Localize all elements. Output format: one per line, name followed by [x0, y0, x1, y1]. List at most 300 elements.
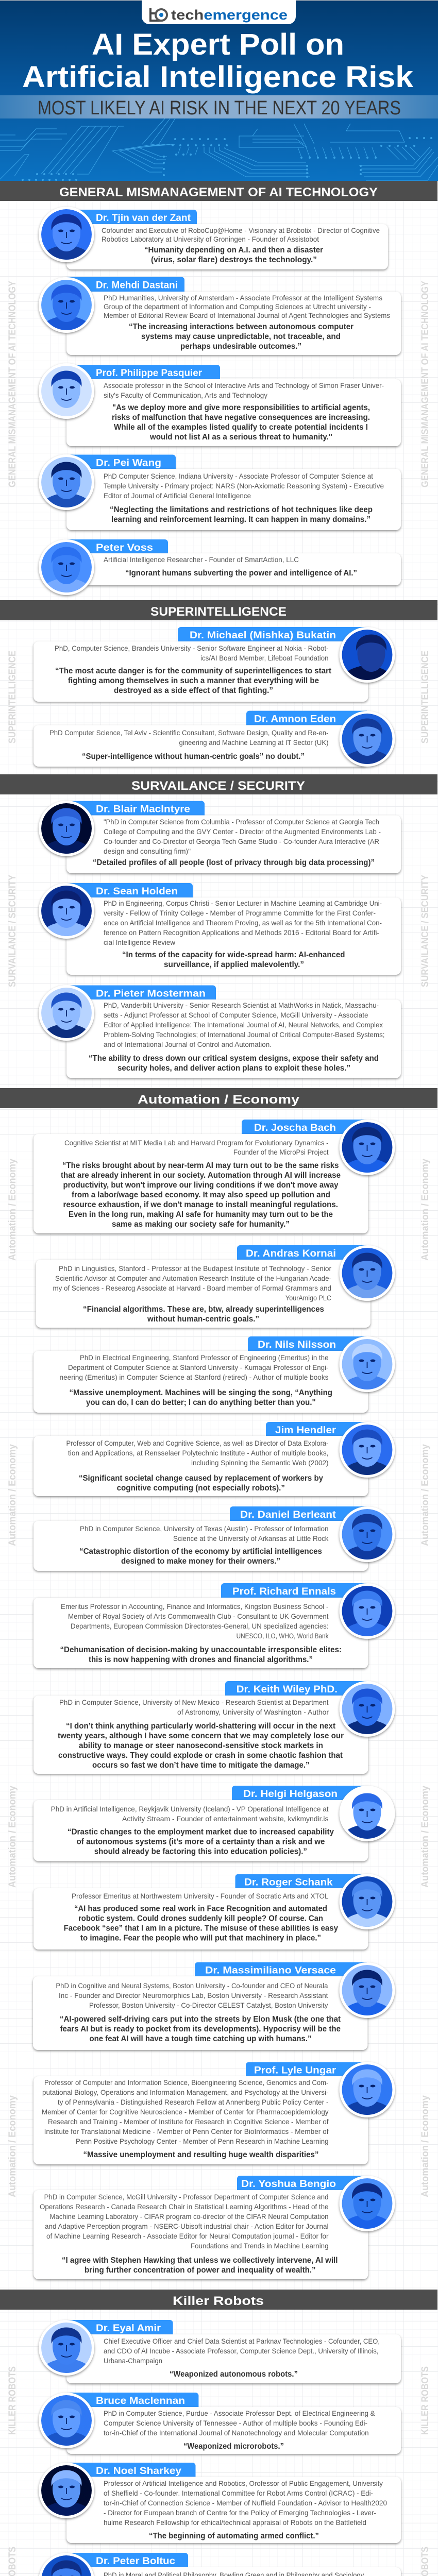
name tab: Dr. Eyal Amir [96, 2323, 161, 2334]
portrait [339, 1786, 395, 1841]
portrait [39, 801, 94, 856]
bio: Group of the department of Information and Computing Sciences at Utrecht university - [104, 302, 371, 311]
bio: PhD in Cognitive and Neural Systems, Boston University - Co-founder and CEO of Neurala [56, 1981, 328, 1990]
panel: Dr. Blair MacIntyre [39, 801, 401, 873]
quote: constructive ways. They could explode or crash in some chaotic fashion that [58, 1751, 343, 1760]
side labels: Automation / Economy [7, 1444, 18, 1546]
portrait [39, 454, 94, 510]
panel: Dr. Roger Schank [33, 1874, 395, 1950]
name tab: Dr. Mehdi Dastani [96, 280, 178, 291]
bio [104, 1001, 384, 1048]
name tab: Prof. Philippe Pasquier [96, 368, 203, 379]
title [22, 28, 414, 94]
bio [55, 644, 329, 662]
bio: - Director for European branch of Centre for the Policy of Emerging Technologies - Lever- [104, 2509, 376, 2517]
name tab: Bruce Maclennan [96, 2396, 185, 2406]
name tab: Dr. Pei Wang [96, 457, 161, 469]
quote: resource exhaustion, if we don't manage to install meaningful regulations. [63, 1200, 338, 1209]
heading: Survailance / Security: SURVAILANCE / SECURITY [131, 779, 305, 793]
bio: of Astronomy, University of Washington - Author [177, 1708, 329, 1716]
heading: Automation / Economy: Automation / Economy [138, 1093, 300, 1107]
name tab [66, 2320, 173, 2334]
card [66, 815, 401, 873]
quote [55, 667, 332, 695]
bio: Inc - Founder and Director Neuromorphics Lab, Boston University - Research Assistant [59, 1991, 328, 1999]
quote: “AI-powered self-driving cars put into the streets by Elon Musk (the one that [60, 2015, 341, 2024]
portrait [39, 2553, 94, 2576]
quote: “The most acute danger is for the community of superintelligences to start [55, 667, 332, 675]
bio: ence on Artificial Intelligence and Theorem Proving, as well as for the 5th International Con- [104, 919, 382, 927]
name tab [237, 1245, 367, 1260]
bio: Professor of Computer, Web and Cognitive Science, as well as Director of Data Explora- [66, 1439, 329, 1447]
bio: Scientific Advisor at Computer and Automation Research Institute of the Hungarian Acade- [55, 1274, 331, 1282]
name tab [230, 1506, 367, 1521]
quote [112, 403, 370, 442]
side labels: GENERAL MISMANAGEMENT OF AI TECHNOLOGY [420, 281, 431, 487]
bio: tion and Applications, at Rensselaer Polytechnic Institute - Author of multiple books, [68, 1449, 329, 1457]
quote [79, 1547, 322, 1566]
quote: ability to manage or steer nanosecond-sensitive stock markets in [79, 1741, 323, 1750]
name tab [66, 985, 216, 999]
card [33, 2190, 368, 2279]
card [33, 1598, 368, 1668]
panel: Dr. Yoshua Bengio [33, 2176, 395, 2279]
quote: security holes, and deliver action plans to exploit these holes.” [117, 1064, 350, 1073]
quote: bring further concentration of power and inequality of wealth.” [85, 2266, 316, 2275]
name tab: Dr. Michael (Mishka) Bukatin [190, 630, 336, 641]
bio: College of Computing and the GVY Center - Director of the Augmented Environments Lab - [104, 827, 381, 836]
heading: General Mismanagement of AI Technology: GENERAL MISMANAGEMENT OF AI TECHNOLOGY [59, 185, 378, 199]
bio: setts - Adjunct Professor at School of Computer Science, McGill University - Associate [104, 1011, 368, 1019]
card [33, 1976, 367, 2050]
name tab [66, 277, 184, 292]
portrait [339, 711, 395, 767]
card [66, 292, 401, 355]
quote: twenty years, although I have some concern that we may completely lose our [58, 1732, 344, 1740]
bio: Penn Positive Psychology Center - Member of Penn Research in Machine Learning [76, 2137, 329, 2145]
heading: Superintelligence: SUPERINTELLIGENCE [150, 605, 287, 619]
quote [89, 1054, 379, 1073]
side labels: Automation / Economy [420, 2095, 431, 2197]
card [66, 2407, 401, 2454]
bio: Machine Learning Laboratory - CIFAR program co-director of the CIFAR Neural Computation [49, 2212, 329, 2221]
quote: “The beginning of automating armed conflict.” [149, 2532, 319, 2540]
quote: you can do, I can do better; I can do anything better than you." [86, 1398, 316, 1407]
quote: “Ignorant humans subverting the power and intelligence of AI.” [125, 569, 357, 578]
quote [60, 2015, 341, 2043]
bio [104, 294, 390, 319]
portrait [339, 1422, 395, 1478]
quote: “The risks brought about by near-term AI may turn out to be the same risks [62, 1161, 339, 1170]
bio: Science at the University of Arkansas at Little Rock [173, 1534, 329, 1543]
bio [60, 1353, 329, 1381]
bio [56, 1981, 328, 2009]
bio: YourAmigo PLC [285, 1294, 331, 1302]
bio: PhD in Computer Science, McGill University - Professor Department of Computer Science and [44, 2193, 329, 2201]
quote: that are already inherent in our society. Automation through AI will increase [61, 1171, 341, 1180]
bio: ics/AI Board Member, Lifeboat Foundation [200, 654, 329, 662]
name tab [66, 365, 220, 379]
name tab [237, 2176, 367, 2190]
bio [64, 1139, 329, 1156]
bio [49, 728, 329, 747]
quote: perhaps undesirable outcomes.” [180, 342, 301, 351]
bio: Chief Executive Officer and Chief Data Scientist at Parknav Technologies - Cofounder, CEO, [104, 2337, 380, 2345]
quote: “Dehumanisation of decision-making by unaccountable irresponsible elites: [60, 1646, 342, 1654]
bio: PhD in Linguistics, Stanford - Professor at the Budapest Institute of Technology - Senior [59, 1264, 331, 1273]
quote [79, 1474, 323, 1493]
bio [104, 2479, 387, 2527]
quote: designed to make money for their owners.” [121, 1557, 280, 1566]
name tab: Dr. Keith Wiley PhD. [237, 1684, 338, 1695]
quote: fighting among themselves in such a manner that everything will be [68, 676, 319, 685]
name tab: Dr. Roger Schank [244, 1877, 333, 1888]
panel: Dr. Mehdi Dastani [39, 277, 401, 355]
bio [104, 472, 384, 500]
bio [53, 1264, 331, 1302]
bio: Cofounder and Executive of RoboCup@Home - Visionary at Brobotix - Director of Cognitive [102, 226, 380, 234]
bio: UNESCO, ILO, WHO, World Bank [237, 1632, 329, 1640]
portrait [339, 1336, 395, 1392]
name tab: Dr. Helgi Helgason [243, 1789, 338, 1800]
quote: destroyed as a side effect of that fighting.” [114, 686, 273, 695]
portrait [339, 1245, 395, 1301]
portrait [39, 2463, 94, 2518]
bio: and of International Journal of Control and Automation. [104, 1040, 272, 1048]
quote: learning and reinforcement learning. It can happen in many domains.” [111, 515, 370, 524]
quote: fears AI but is ready to pocket from its developments). Hypocrisy will be the [60, 2025, 341, 2033]
quote: “Catastrophic distortion of the economy by artificial intelligences [79, 1547, 322, 1556]
quote [62, 2256, 338, 2275]
quote: Facebook “see” that I am in a picture. The misuse of these abilities is easy [64, 1924, 338, 1933]
bio: Editor of Journal of Artificial General Intelligence [104, 492, 251, 500]
bio: cial Intelligence Review [104, 938, 176, 946]
bio: Professor Emeritus at Northwestern University - Founder of Socratic Arts and XTOL [72, 1892, 329, 1900]
quote: “The increasing interactions between autonomous computer [129, 323, 353, 331]
bio: PhD Humanities, University of Amsterdam - Associate Professor at the Intelligent Systems [104, 294, 382, 302]
name tab: Dr. Sean Holden [96, 886, 178, 897]
quote [68, 1828, 334, 1856]
bio: PhD Computer Science, Indiana University - Associate Professor of Computer Science at [104, 472, 373, 480]
bio: ference on Pattern Recognition Applications and Methods 2016 - Editorial Board for Artifi- [104, 928, 379, 937]
side labels: SUPERINTELLIGENCE [420, 651, 431, 743]
quote: “AI has produced some real work in Face Recognition and automated [74, 1904, 327, 1913]
name tab: Dr. Daniel Berleant [240, 1510, 336, 1520]
panel: Dr. Tjin van der Zant [39, 207, 388, 269]
name tab: Dr. Yoshua Bengio [241, 2179, 336, 2190]
quote: would not list AI as a serious threat to humanity." [149, 433, 332, 442]
side labels: SURVAILANCE / SECURITY [420, 875, 431, 987]
panel: Prof. Lyle Ungar [33, 2062, 395, 2164]
bio [40, 2193, 329, 2250]
bio: Cognitive Scientist at MIT Media Lab and Harvard Program for Evolutionary Dynamics - [64, 1139, 329, 1147]
heading: Automation / Economy [0, 1088, 437, 1108]
circuit board decoration [0, 118, 438, 180]
name tab: Prof. Richard Ennals [232, 1586, 336, 1597]
heading: Superintelligence [0, 600, 437, 620]
portrait [39, 363, 94, 419]
quote: “I don’t think anything particularly world-shattering will occur in the next [66, 1722, 336, 1731]
portrait [39, 2320, 94, 2376]
card [66, 469, 401, 530]
quote: should already be factoring this into education policies).” [94, 1848, 307, 1856]
bio: PhD in Electrical Engineering, Stanford Professor of Engineering (Emeritus) in the [80, 1353, 329, 1362]
quote: productivity, but won't improve our living conditions if we don't move away [63, 1181, 339, 1190]
bio [104, 2409, 375, 2437]
bio [104, 818, 381, 855]
bio: Emeritus Professor in Accounting, Finance and Informatics, Kingston Business School - [61, 1602, 329, 1611]
panel: header banner [0, 0, 438, 181]
bio [59, 1698, 329, 1716]
quote: risks of malfunction that have negative consequences are increasing. [112, 413, 370, 422]
bio: Editor of Applied Intelligence: The International Journal of AI, Neural Networks, and Complex [104, 1021, 383, 1029]
quote [61, 1161, 341, 1229]
bio: PhD in Engineering, Corpus Christi - Senior Lecturer in Machine Learning at Cambridge Uni- [104, 899, 382, 907]
name tab: Dr. Massimiliano Versace [205, 1965, 336, 1976]
side labels: Automation / Economy [7, 1786, 18, 1888]
panel: Dr. Eyal Amir [39, 2320, 401, 2383]
quote [58, 1722, 344, 1770]
bio: Member of Royal Society of Arts Commonwealth Club - Consultant to UK Government [68, 1612, 329, 1620]
quote: “Humanity depending on A.I. and then a disaster [144, 246, 323, 255]
bio: Institute for Translational Medicine - Member of Penn Center for BioInformatics - Member of [44, 2127, 329, 2136]
quote: “In terms of the capacity for wide-spread harm: AI-enhanced [122, 951, 345, 959]
quote: While all of the examples listed qualify to create potential incidents I [114, 423, 368, 432]
quote: without human-centric goals.” [147, 1315, 259, 1324]
bio: Temple University - Primary project: NARS (Non-Axiomatic Reasoning System) - Executive [104, 482, 384, 490]
bio: PhD in Artificial Intelligence, Reykjavik University (Iceland) - VP Operational Intelligence at [51, 1805, 329, 1813]
portrait [339, 1583, 395, 1639]
quote [64, 1904, 338, 1942]
quote: “Massive unemployment. Machines will be singing the song, “Anything [69, 1388, 332, 1397]
bio: Problem-Solving Technologies; of International Journal of Critical Computer-Based Systems; [104, 1030, 384, 1039]
bio: Urbana-Champaign [104, 2357, 162, 2365]
bio: Departments, European Commission Directorates-General, UN specialized agencies: [71, 1622, 329, 1630]
card [33, 1696, 368, 1774]
card [33, 1800, 368, 1861]
side labels: Automation / Economy [420, 1444, 431, 1546]
bio: Research and Training - Member of Institute for Research in Cognitive Science - Member of [48, 2117, 329, 2126]
heading: General Mismanagement of AI Technology [0, 181, 437, 201]
side labels: Automation / Economy [420, 1786, 431, 1888]
bio: Computer Science University of Tennessee - Author of multiple books - Founding Edi- [104, 2419, 367, 2427]
portrait [39, 2393, 94, 2448]
bio [80, 1524, 329, 1543]
name tab [66, 883, 193, 897]
bio: ty of Pennsylvania - Distinguished Research Fellow at Annenberg Public Policy Center - [58, 2098, 329, 2106]
quote [129, 323, 353, 351]
portrait [39, 277, 94, 333]
bio: design and consulting firm)" [104, 847, 191, 855]
name tab: Dr. Pieter Mosterman [96, 988, 206, 999]
card [66, 379, 401, 446]
bio: PhD, Vanderbilt University - Senior Research Scientist at MathWorks in Natick, Massachu- [104, 1001, 379, 1009]
logo tab [142, 0, 296, 24]
bio: PhD Computer Science, Tel Aviv - Scientific Consultant, Software Design, Quality and Re-en- [49, 728, 329, 737]
name tab: Dr. Joscha Bach [254, 1123, 336, 1133]
panel: Dr. Pei Wang [39, 454, 401, 530]
card [66, 999, 401, 1078]
panel: Dr. Amnon Eden [33, 711, 395, 767]
panel: Dr. Massimiliano Versace [33, 1962, 395, 2050]
bio: Member of Editorial Review Board of International Journal of Agent Technologies and Systems [104, 311, 390, 319]
panel: Bruce Maclennan [39, 2393, 401, 2454]
panel: Peter Voss [39, 539, 401, 595]
portrait [339, 1962, 395, 2018]
quote: one feat AI will have a tough time catching up with humans.” [90, 2035, 311, 2043]
bio: "PhD in Computer Science from Columbia - Professor of Computer Science at Georgia Tech [104, 818, 379, 826]
bio: tor-in-Chief of the International Journal of Nanotechnology and Molecular Computation [104, 2429, 369, 2437]
side labels: Automation / Economy [7, 1159, 18, 1261]
card [33, 1134, 368, 1233]
bio [51, 1805, 329, 1823]
panel: Prof. Richard Ennals [33, 1583, 395, 1668]
name tab [242, 1120, 367, 1134]
name tab [221, 1583, 367, 1598]
bio: putational Biology, Operations and Information Management, and Psychology at the Universi- [42, 2088, 329, 2096]
quote: “Neglecting the limitations and restrictions of hot techniques like deep [110, 505, 373, 514]
bio: Professor of Computer and Information Science, Bioengineering Science, Genomics and Com- [44, 2078, 329, 2087]
name tab [66, 801, 205, 815]
panel: Dr. Keith Wiley PhD. [33, 1681, 395, 1774]
bio: Associate professor in the School of Interactive Arts and Technology of Simon Fraser Univer- [104, 381, 384, 389]
panel: Dr. Helgi Helgason [33, 1786, 395, 1861]
name tab [66, 210, 197, 224]
name tab [266, 1422, 367, 1436]
bio: Professor, Boston University - Co-Director CELEST Catalyst, Boston University [89, 2001, 328, 2009]
quote: “The ability to dress down our critical system designs, expose their safety and [89, 1054, 379, 1063]
card [33, 2076, 368, 2164]
card [66, 224, 388, 269]
bio: Activity Stream - Founder of entertainment website, kvikmyndir.is [122, 1815, 329, 1823]
title: Artificial Intelligence Risk [22, 60, 414, 94]
card [66, 897, 401, 975]
bio [61, 1602, 329, 1640]
bio: Co-founder and Co-Director of Georgia Tech Game Studio - Co-founder Aura Interactive (AR [104, 837, 379, 845]
name tab: Dr. Noel Sharkey [96, 2466, 181, 2477]
bio: PhD in Computer Science, University of Texas (Austin) - Professor of Information [80, 1524, 329, 1533]
bio: gineering and Machine Learning at IT Sector (UK) [179, 738, 329, 747]
quote: from a labor/wage based economy. It may also speed up pollution and [72, 1191, 330, 1199]
quote: (virus, solar flare) destroys the technology.” [151, 256, 317, 264]
card [66, 2477, 401, 2543]
card [33, 641, 368, 702]
panel: Dr. Joscha Bach [33, 1120, 395, 1233]
quote: “Weaponized microrobots.” [183, 2442, 284, 2451]
bio: of Sheffield - Co-founder. International Committee for Robot Arms Control (ICRAC) - Edi- [104, 2489, 373, 2497]
name tab [66, 2463, 196, 2477]
quote: surveillance, if applied malevolently.” [164, 960, 304, 969]
name tab: Peter Voss [96, 543, 153, 553]
bio: and CDO of AI Incube - Associate Professor, Computer Science Dept., University of Illinois, [104, 2347, 379, 2355]
bio [104, 899, 382, 946]
panel: Dr. Andras Kornai [36, 1245, 395, 1328]
portrait [39, 985, 94, 1041]
name tab: Dr. Amnon Eden [254, 714, 336, 724]
quote: robotic system. Could drones suddenly kill people? Of course. Can [78, 1914, 323, 1923]
card [33, 725, 368, 767]
bio: Department of Computer Science at Stanford University - Kumagai Professor of Engi- [68, 1363, 329, 1371]
quote: cognitive computing (not especially robots).” [117, 1484, 285, 1493]
quote [83, 1305, 324, 1324]
quote: Even in the long run, making AI safe for humanity may turn out to be the [69, 1210, 333, 1219]
portrait [339, 1120, 395, 1175]
portrait [339, 2176, 395, 2231]
side labels: Automation / Economy [420, 1159, 431, 1261]
card [33, 1351, 368, 1413]
name tab [225, 1681, 367, 1696]
quote: “Massive unemployment and resulting huge wealth disparities” [83, 2150, 318, 2159]
name tab: Prof. Lyle Ungar [254, 2065, 336, 2076]
name tab [246, 711, 367, 725]
bio [104, 2337, 380, 2365]
heading: Survailance / Security [0, 774, 437, 794]
panel: Dr. Pieter Mosterman [39, 985, 401, 1078]
panel: Dr. Peter Boltuc [39, 2553, 401, 2576]
quote: “I agree with Stephen Hawking that unless we collectively intervene, AI will [62, 2256, 338, 2265]
title: AI Expert Poll on [92, 28, 344, 61]
icon: logo mark [150, 8, 167, 21]
bio: tor-in-Chief of Connection Science - Member of Nuffield Foundation - Advisor to Health2020 [104, 2499, 387, 2507]
panel: Dr. Nils Nilsson [33, 1336, 395, 1413]
name tab [66, 2393, 198, 2407]
name tab [66, 539, 168, 553]
portrait [339, 1506, 395, 1562]
quote: same as making our society safe for humanity.” [112, 1220, 290, 1229]
card [66, 553, 401, 585]
panel: Dr. Sean Holden [39, 883, 401, 975]
name tab [66, 2553, 188, 2567]
card [33, 1888, 368, 1950]
side labels: GENERAL MISMANAGEMENT OF AI TECHNOLOGY [7, 281, 18, 487]
bio [66, 1439, 329, 1467]
quote: of autonomous systems (it’s more of a certainty than a risk and we [76, 1837, 325, 1846]
portrait [339, 2062, 395, 2117]
bio: my of Sciences - Researcg Associate at Harvard - Board member of Formal Grammars and [53, 1284, 331, 1292]
name tab [248, 1336, 367, 1351]
quote: to imagine. Fear the people who will put that machinery in place.” [80, 1934, 321, 1942]
quote: systems may cause unpredictable, not traceable, and [141, 332, 341, 341]
portrait [339, 1681, 395, 1737]
bio [102, 226, 380, 243]
quote: “Drastic changes to the employment market due to increased capability [68, 1828, 334, 1836]
name tab [66, 454, 176, 469]
quote [69, 1388, 332, 1407]
side labels: SURVAILANCE / SECURITY [7, 875, 18, 987]
bio: Foundations and Trends in Machine Learning [191, 2242, 329, 2250]
name tab [246, 2062, 367, 2076]
heading: Killer Robots: Killer Robots [173, 2294, 264, 2308]
quote: “Detailed profiles of all people (lost of privacy through big data processing)” [93, 858, 375, 867]
card [66, 2334, 401, 2383]
bio: Member of Center for Cognitive Neuroscience - Member of Center for Pharmacoepidemiology [42, 2108, 329, 2116]
card [33, 1521, 368, 1571]
bio: sity's Faculty of Communication, Arts and Technology [104, 391, 267, 399]
quote [60, 1646, 342, 1664]
name tab: Dr. Tjin van der Zant [96, 213, 191, 224]
quote: “Significant societal change caused by replacement of workers by [79, 1474, 323, 1483]
side labels: Automation / Economy [7, 2095, 18, 2197]
heading: Killer Robots [0, 2290, 437, 2310]
panel: Jim Hendler [33, 1422, 395, 1496]
card [66, 2567, 401, 2576]
panel: Dr. Noel Sharkey [39, 2463, 401, 2543]
bio: hulme Research Fellowship for ethical/technical appraisal of Robots on the Battlefield [104, 2518, 366, 2527]
bio: Professor of Artificial Intelligence and Robotics, Orofessor of Public Engagement, University [104, 2479, 383, 2487]
logo tab: tech emergence [171, 7, 288, 23]
panel: Prof. Philippe Pasquier [39, 363, 401, 446]
quote: this is now happening with drones and financial algorithms.” [89, 1655, 313, 1664]
